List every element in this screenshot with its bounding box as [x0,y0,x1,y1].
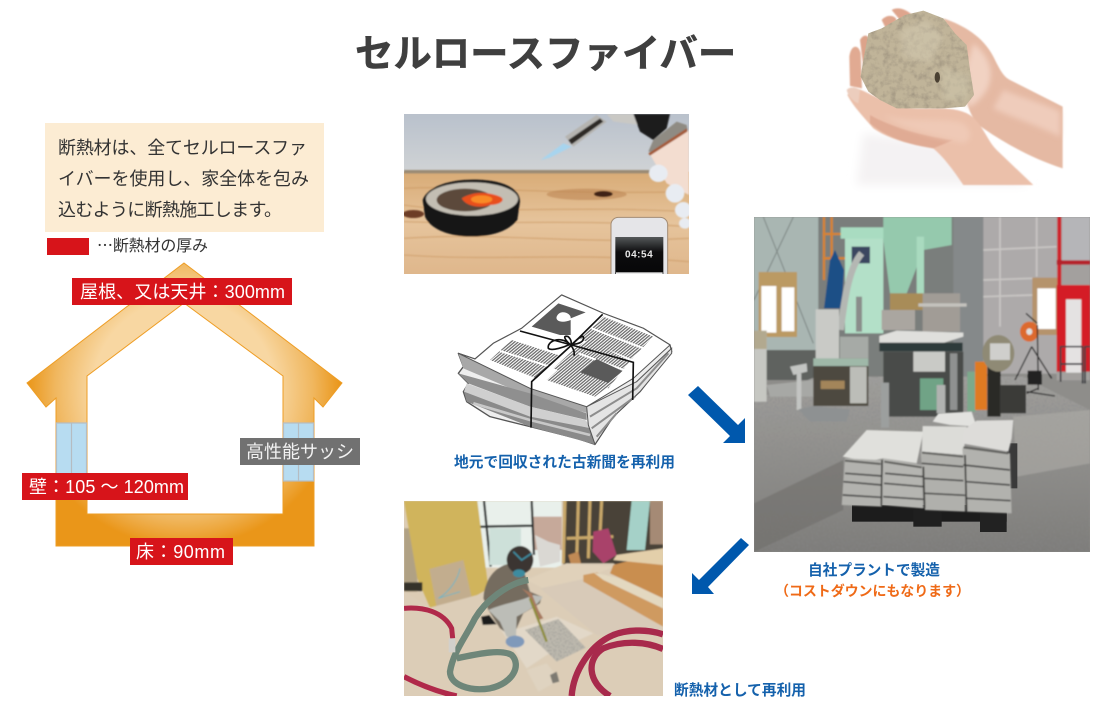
red rack [1057,285,1090,372]
glove [649,165,668,182]
green machine [845,230,883,333]
side table [813,358,868,367]
title: セルロースファイバー [355,33,736,76]
background room [477,501,562,568]
scale [790,363,807,375]
photo: flame test with torch [404,114,689,274]
caption: plant: （コストダウンにもなります） [775,583,970,599]
right window [1032,278,1059,335]
back walls [754,217,821,350]
illustration: bundled old newspapers [458,295,672,444]
cellulose hole [525,619,586,662]
gas can [648,122,689,153]
white bags left [816,309,839,359]
hatch columns [490,317,653,397]
floor [430,562,618,628]
label: roof [72,278,292,305]
stack [458,295,672,444]
legend: insulation thickness [47,232,208,256]
photo block [532,303,586,335]
photo: blowing cellulose insulation into floor [404,501,663,696]
pallet [852,505,1007,522]
label: floor: 床：90mm [136,542,225,562]
right window sash [284,423,314,481]
paper on feeder [879,331,963,345]
bowl [423,180,520,236]
label: floor [130,538,233,565]
label: high-performance sash: 高性能サッシ [246,442,354,462]
newspaper stacks [842,412,1013,513]
caption: reuse as insulation: 断熱材として再利用 [674,681,806,699]
headline block [580,359,622,383]
caption: plant: 自社プラントで製造 [808,561,940,579]
info text box [45,123,324,232]
label: wall: 壁：105 ～ 120mm [29,477,184,497]
legend: insulation thickness: …断熱材の厚み [97,232,208,256]
tanks [923,293,960,332]
arrow: newspaper to plant [688,386,745,443]
label: wall [22,473,188,500]
duct [841,253,862,330]
ladder orange [823,217,845,280]
left window sash [56,423,86,475]
caption: plant [775,561,970,599]
left window [759,272,797,337]
orange unit [975,362,987,410]
plywood [404,501,488,608]
machine body [883,352,963,417]
person [483,563,542,637]
info text box: 断熱材は、全てセルロースファ [58,138,307,158]
hoses [404,580,663,696]
torch nozzle [565,115,607,147]
insulation shell [27,263,342,546]
info text box: イバーを使用し、家全体を包み [58,169,309,189]
info text box: 込むように断熱施工します。 [58,200,282,220]
flame [541,143,572,160]
label: high-performance sash [240,438,360,465]
soft skin highlights [883,43,1060,143]
floor [754,377,1090,552]
phone [610,216,668,274]
arrow: plant to insulation [692,538,749,594]
photo: cellulose fibre held in hands [847,8,1063,185]
blue cover [824,250,844,308]
caption: newspaper: 地元で回収された古新聞を再利用 [454,454,675,471]
fan and stand [1020,322,1039,342]
string [520,314,633,428]
lumber [610,560,663,598]
label: roof: 屋根、又は天井：300mm [80,282,285,302]
top sheet [458,295,670,407]
house cross-section diagram [22,263,360,565]
folding chairs [1061,347,1090,383]
photo: in-house manufacturing plant [754,217,1090,552]
phone: 04:54 [625,250,653,261]
